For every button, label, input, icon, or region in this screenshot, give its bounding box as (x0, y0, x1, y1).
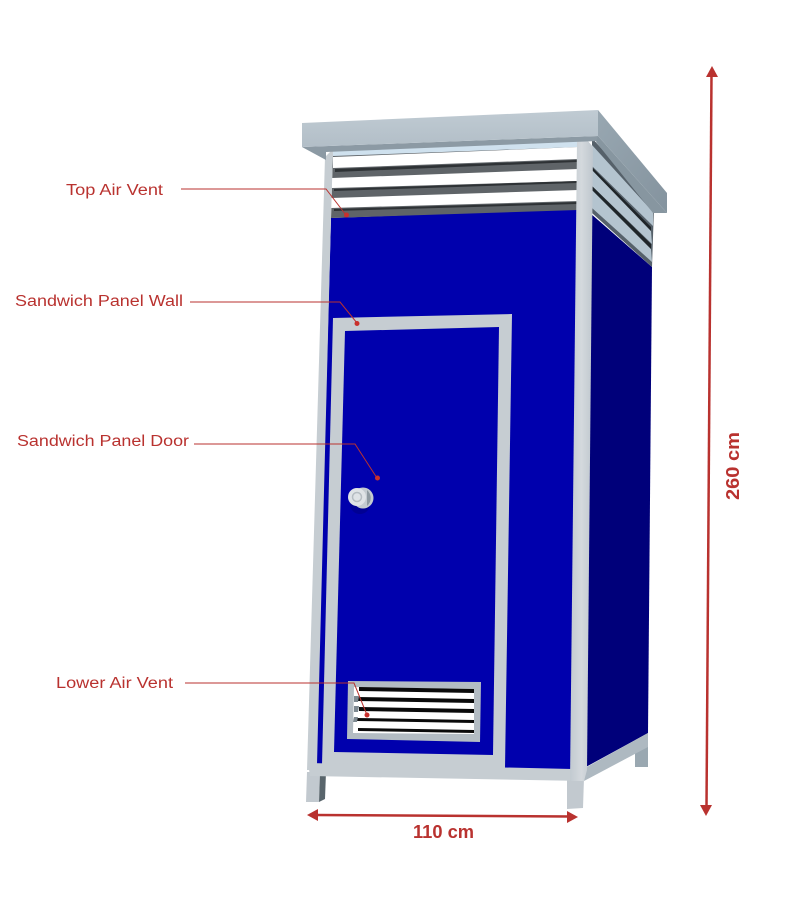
label: lower air vent (56, 675, 370, 718)
anchor dot (354, 321, 360, 326)
width dimension (307, 809, 578, 842)
label text: Sandwich Panel Door (17, 433, 189, 450)
leader line (190, 302, 357, 323)
anchor dot (364, 712, 370, 718)
right corner post (570, 141, 593, 781)
height dimension (700, 66, 743, 816)
leader line (185, 683, 367, 715)
front top vent (331, 141, 578, 218)
leader line (194, 444, 377, 478)
leader line (181, 189, 346, 215)
rear leg (635, 738, 648, 767)
sandwich panel door (334, 327, 499, 755)
side wall (584, 213, 652, 768)
left corner post (307, 149, 333, 770)
label text: Top Air Vent (66, 182, 164, 199)
front wall panel (316, 209, 578, 770)
label text: Lower Air Vent (56, 675, 174, 692)
left front leg (306, 772, 326, 802)
width value: 110 cm (413, 822, 474, 842)
label: sandwich panel door (17, 433, 380, 480)
door frame (322, 314, 512, 768)
label: sandwich panel wall (15, 293, 360, 326)
anchor dot (344, 212, 349, 218)
base rail (308, 763, 586, 781)
height value: 260 cm (723, 432, 743, 500)
width arrow (307, 809, 578, 823)
right front leg (567, 778, 584, 809)
side top vent (592, 138, 654, 267)
portable cabin illustration (302, 110, 667, 809)
anchor dot (375, 476, 380, 480)
lower air vent (347, 681, 481, 742)
side base rail (584, 733, 648, 781)
label: top air vent (66, 182, 349, 218)
label text: Sandwich Panel Wall (15, 293, 183, 310)
door handle (348, 488, 374, 514)
roof (302, 110, 667, 213)
height arrow (700, 66, 718, 816)
